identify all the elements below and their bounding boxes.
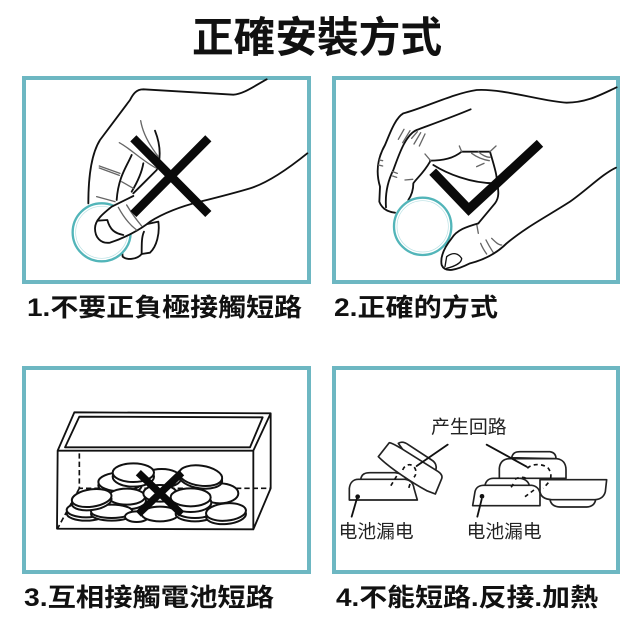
panel 2 frame (334, 78, 618, 282)
illustration: hand pinching coin across both poles (73, 79, 307, 261)
panel 3 frame (24, 368, 309, 572)
label: leak left: 电池漏电 (339, 521, 414, 542)
caption 4: 4.不能短路.反接.加熱 (336, 584, 598, 612)
illustration: hand holding coin by its edge (378, 87, 617, 270)
caption 1: 1.不要正負極接觸短路 (27, 294, 302, 322)
panel 2: correct grip (334, 78, 618, 282)
panel 3: loose coins in box (24, 368, 309, 572)
panel 1 frame (24, 78, 309, 282)
illustration: leaking cells forming circuit (339, 417, 607, 542)
cross mark (133, 138, 208, 214)
panel 4 frame (334, 368, 618, 572)
left battery pair (349, 442, 448, 517)
caption 2: 2.正確的方式 (334, 293, 498, 322)
panel 4: stacked batteries (334, 368, 618, 572)
right battery stack (473, 445, 607, 517)
coin (73, 203, 131, 261)
label: circuit: 产生回路 (431, 417, 507, 438)
illustration: box of coin cells (57, 412, 271, 529)
coin (394, 198, 451, 255)
cross mark (138, 473, 182, 514)
check mark (433, 143, 540, 209)
panel 1: wrong grip (24, 78, 309, 282)
coins (67, 463, 247, 526)
label: leak right: 电池漏电 (467, 521, 542, 542)
caption 3: 3.互相接觸電池短路 (24, 584, 274, 612)
title: 正確安裝方式 (192, 14, 442, 61)
